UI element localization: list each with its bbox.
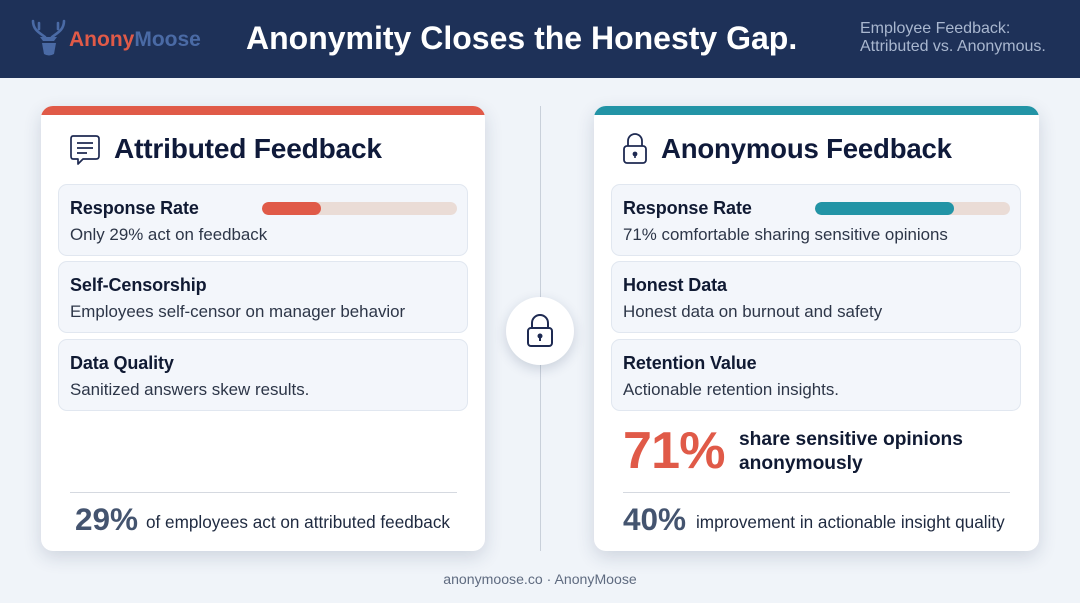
row: honest data [611,261,1021,333]
logo wordmark: AnonyMoose [69,28,201,51]
stat caption: 71% [739,429,963,474]
heading: Anonymous Feedback [661,133,952,164]
stat: 71%: 71% [623,422,725,480]
row: self-censorship: Self-Censorship [70,275,207,295]
row: honest data: Honest data on burnout and safety [623,302,882,321]
row: data quality: Data Quality [70,353,174,373]
row: response rate [58,184,468,256]
center divider [540,106,541,551]
row: response rate: 71% comfortable sharing sensitive opinions [623,225,948,244]
icon: lock [623,133,647,164]
footer: anonymoose.co · AnonyMoose [443,571,637,587]
title: Anonymity Closes the Honesty Gap. [246,20,797,56]
row: self-censorship: Employees self-censor on manager behavior [70,302,405,321]
subtitle: Attributed vs. Anonymous. [860,38,1046,55]
row: honest data: Honest Data [623,275,727,295]
row: self-censorship [58,261,468,333]
row: retention value: Actionable retention insights. [623,380,839,399]
heading: Attributed Feedback [114,133,382,164]
subtitle: Employee Feedback: [860,20,1010,37]
panel: anonymous feedback [594,106,1039,551]
row: retention value: Retention Value [623,353,757,373]
row: response rate: Response Rate [70,198,199,218]
header band [0,0,1080,78]
subtitle [860,20,1046,55]
row: response rate [611,184,1021,256]
stat: 29%: 29% [75,501,138,537]
icon: center lock [506,297,574,365]
stat caption: of employees act on attributed feedback [146,512,450,532]
row: data quality [58,339,468,411]
stat caption: 71%: anonymously [739,452,863,474]
row: response rate: Response Rate [623,198,752,218]
row: response rate: Only 29% act on feedback [70,225,267,244]
stat caption: 71%: share sensitive opinions [739,429,963,450]
icon: speech bubble [70,135,100,165]
row: data quality: Sanitized answers skew results. [70,380,309,399]
logo icon: moose [32,20,66,56]
stat: 40%: 40% [623,501,686,537]
stat caption: improvement in actionable insight quality [696,512,1005,532]
panel: attributed feedback [41,106,485,551]
row: retention value [611,339,1021,411]
